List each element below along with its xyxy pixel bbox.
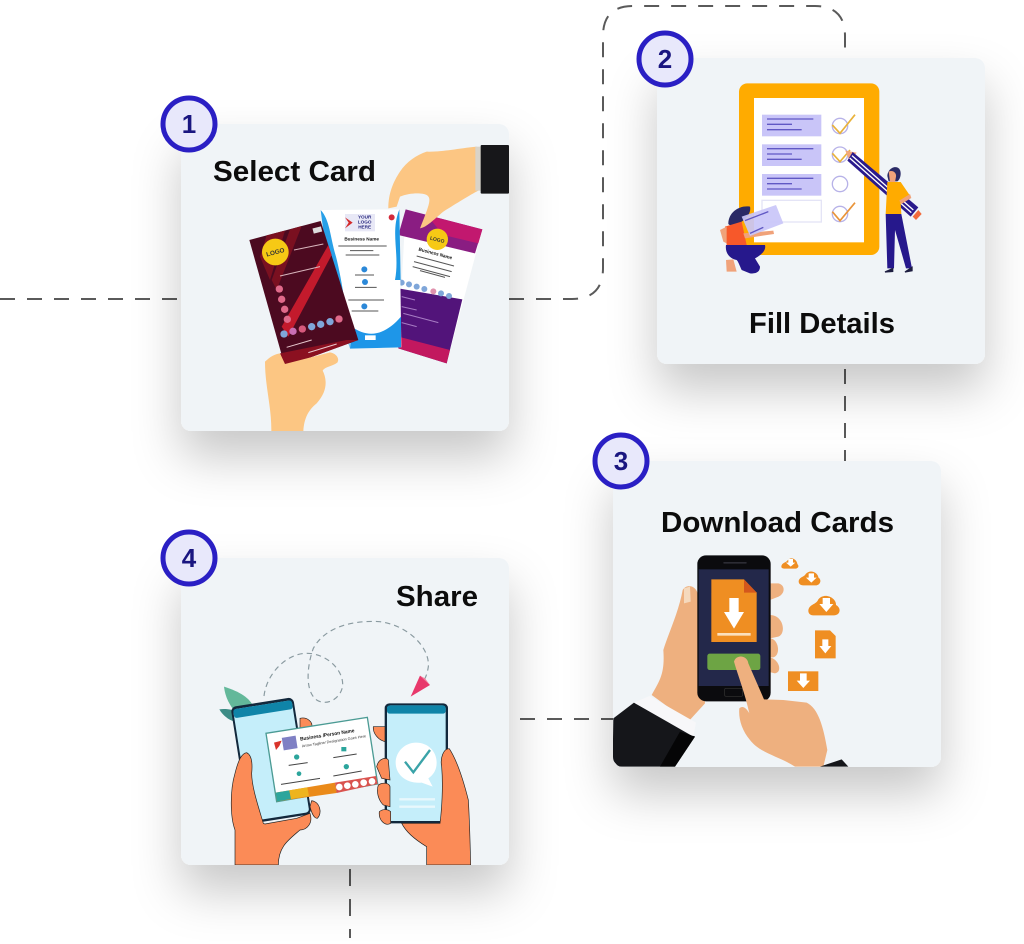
badge: step 3	[595, 435, 647, 487]
thumb nail	[684, 587, 691, 603]
left phone	[231, 697, 312, 824]
shared business card: Arrow Tagline/ Designation Goes Here	[302, 734, 366, 748]
badge: step 2: 2	[658, 44, 672, 74]
middle card: blue and white: HERE	[358, 225, 371, 230]
sleeve left	[613, 702, 695, 767]
panel: step 1 select card	[181, 124, 509, 432]
person: kneeling with form	[720, 205, 783, 273]
right card: purple: LOGO	[429, 236, 445, 245]
sleeve right	[820, 759, 848, 767]
hand: top with black sleeve	[388, 145, 509, 228]
leaves	[219, 687, 253, 722]
middle card: blue and white: YOUR	[358, 215, 372, 220]
right card: purple: Business Name	[418, 247, 453, 261]
left card: maroon	[249, 221, 358, 367]
dashed connector: step 2 to step 3	[844, 369, 846, 461]
middle card: blue and white	[321, 209, 401, 349]
illustration: phone download with hands	[613, 555, 848, 767]
shared business card: Business /Person Name	[300, 728, 355, 743]
panel: step 3 download cards	[613, 461, 941, 767]
badge: step 3: 3	[614, 446, 628, 476]
heading: download cards: Download Cards	[661, 507, 894, 539]
heading: select card: Select Card	[213, 156, 376, 188]
heading: share: Share	[396, 581, 478, 613]
shared business card	[266, 717, 378, 802]
right phone	[385, 703, 448, 823]
dashed connector: step 3 to step 4	[520, 718, 613, 720]
panel: step 2 fill details	[657, 58, 985, 364]
left hand fingertip	[310, 801, 320, 818]
clipboard	[739, 83, 879, 255]
badge: step 4: 4	[182, 543, 197, 573]
holding hand back	[652, 583, 784, 722]
left phone fingers behind card	[300, 718, 312, 729]
pressing hand	[734, 656, 827, 767]
right hand fingers	[377, 758, 391, 824]
left card: maroon: LOGO	[266, 247, 286, 259]
left hand	[231, 753, 311, 865]
dashed flight path	[264, 621, 428, 702]
person: standing	[885, 167, 912, 272]
illustration: hands holding three cards	[249, 145, 509, 432]
illustration: checklist form with two people	[720, 83, 922, 273]
heading: fill details: Fill Details	[749, 308, 895, 340]
dashed connector: step 1 to step 2	[0, 6, 845, 299]
middle card: blue and white: LOGO	[358, 220, 372, 225]
right hand	[402, 749, 471, 865]
pencil	[845, 151, 922, 220]
badge: step 4	[163, 532, 215, 584]
panel: step 4 share	[181, 558, 509, 865]
dashed connector: exit from step 4	[349, 869, 351, 938]
illustration: two phones sharing a card	[219, 621, 471, 865]
badge: step 1: 1	[182, 109, 196, 139]
middle card: blue and white: Business Name	[344, 236, 379, 241]
badge: step 1	[163, 98, 215, 150]
badge: step 2	[639, 33, 691, 85]
hand: bottom	[265, 352, 338, 432]
right phone fingers behind card	[373, 727, 385, 742]
icons: clouds, file, envelope	[781, 558, 840, 691]
right card: purple	[398, 209, 482, 363]
paper plane	[411, 676, 430, 697]
phone	[697, 555, 771, 701]
